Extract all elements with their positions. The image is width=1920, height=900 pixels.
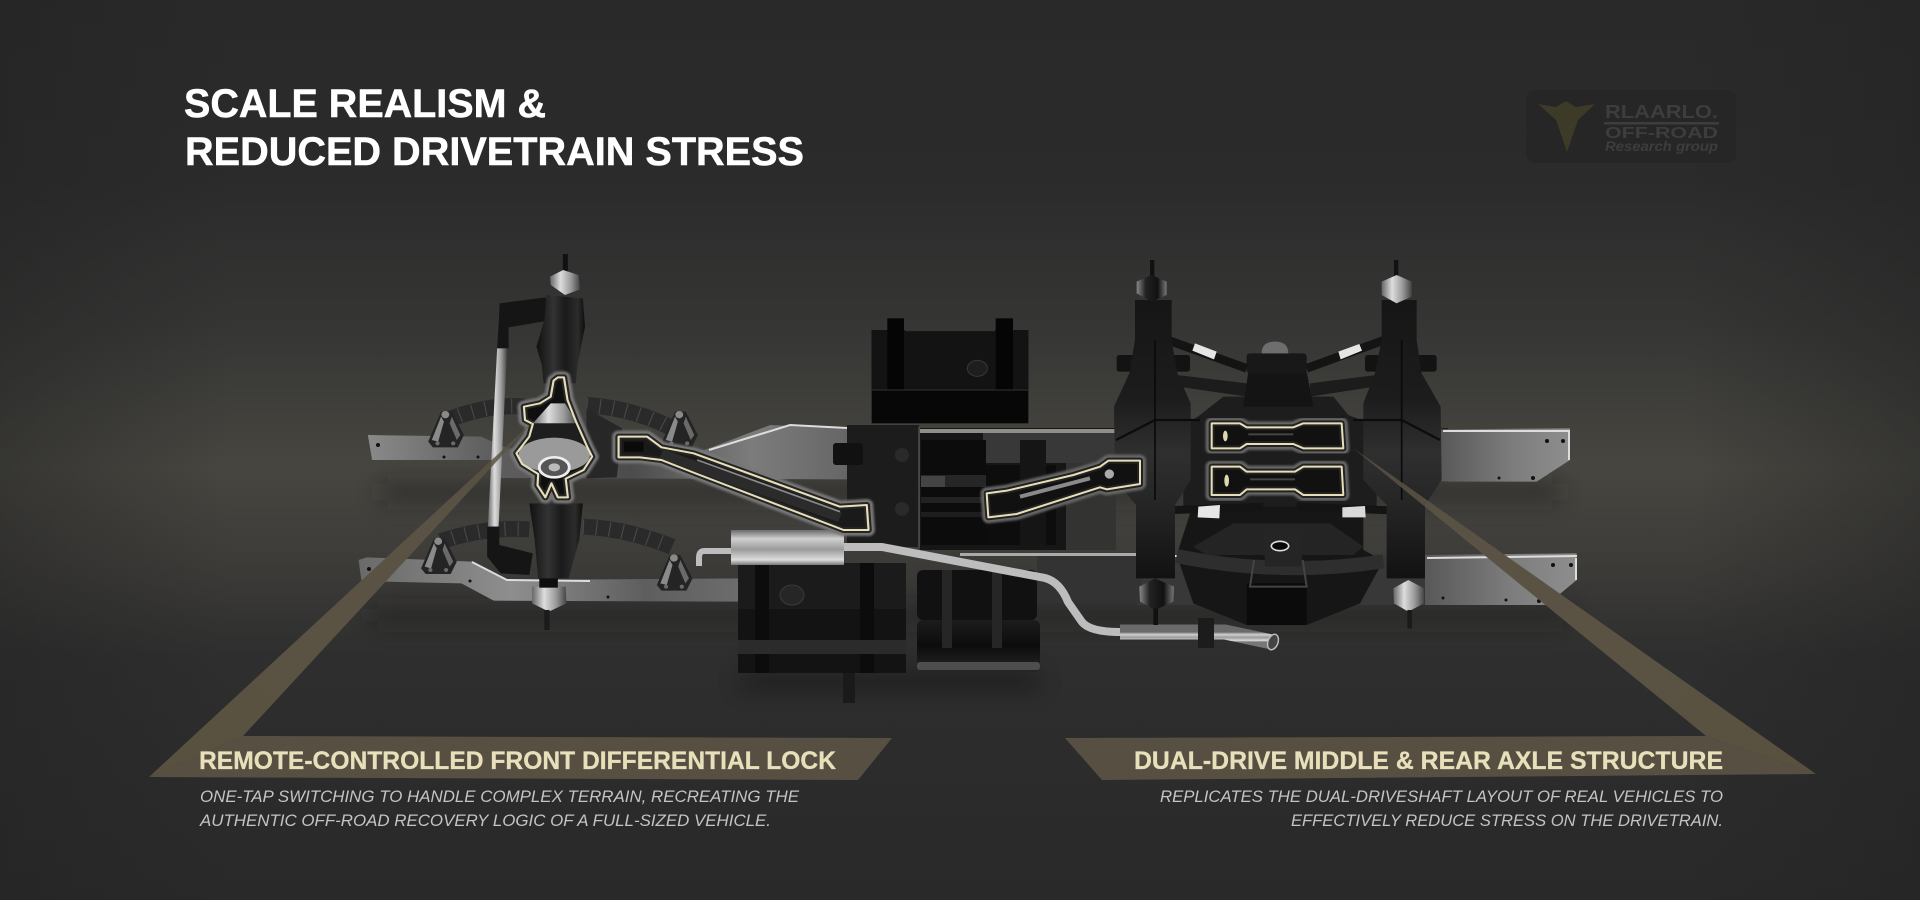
upper mid rail behind rear axle [1113,428,1448,482]
dark band [987,461,1140,517]
dark band [1212,423,1343,448]
hub collar [539,578,558,588]
spring shackles [421,411,698,591]
leaf springs [440,405,679,547]
cream yoke [1224,475,1229,487]
title [184,82,804,174]
right spine [1399,340,1404,500]
left description [199,787,800,830]
tail pipe [844,547,1120,632]
shaft sheen [1250,478,1295,480]
muffler [731,530,844,565]
shaft sheen [697,460,840,512]
upper knuckle [536,295,585,383]
left heading: REMOTE-CONTROLLED FRONT DIFFERENTIAL LOCK [199,747,836,775]
logo rule [1604,122,1719,124]
rear driveshaft lower highlight [1212,467,1343,495]
right heading: DUAL-DRIVE MIDDLE & REAR AXLE STRUCTURE [1134,747,1723,775]
steering arm lower [487,527,533,575]
left banjo housing [1114,300,1191,578]
top block [1243,372,1313,407]
air tanks [917,570,1040,672]
dark diff band [524,423,586,445]
lower hub [532,587,566,612]
shaft sheen [1248,433,1293,435]
logo subtitle: OFF-ROAD [1605,125,1718,142]
cream outline [619,437,869,530]
title line 1: SCALE REALISM & [184,82,546,126]
exhaust clamp [1198,618,1214,648]
shaft sheen [1020,478,1090,497]
center bracket [1263,527,1303,567]
rear driveshaft upper highlight [1212,423,1343,448]
left spine [1152,340,1157,500]
left lower link [1157,507,1263,511]
left bottom stud [1153,608,1158,625]
U-bolt clamp [1250,560,1307,587]
rear muffler pipe [1120,632,1272,642]
transmission block [921,440,1056,545]
left crossbar [1116,420,1200,440]
front differential highlight [516,377,592,497]
logo emblem [1538,101,1595,152]
right top stud [1394,260,1398,278]
upper struts [1177,375,1247,397]
exhaust system [699,530,1280,651]
rail bolt holes [367,439,1573,603]
lower knuckle [529,503,583,578]
battery box [872,318,1028,423]
pinion center [549,463,560,471]
right wing mount [1365,355,1437,372]
left top stud [1150,260,1154,278]
callout ribbon: rear axle [1065,736,1816,780]
right description [1160,787,1723,830]
right top nut [1382,275,1412,303]
central drivetrain body [738,318,1142,703]
lower chassis block [1247,583,1307,625]
shaft joint [1105,469,1114,479]
left upper link tab [1192,343,1217,359]
left upper link [1153,335,1247,368]
halo [1212,467,1343,495]
cream outline [1212,467,1343,495]
halo [1212,423,1343,448]
central bridge [1183,397,1377,507]
rail highlights [472,425,1577,581]
front driveshaft highlight [619,437,869,530]
right description line 1: REPLICATES THE DUAL-DRIVESHAFT LAYOUT OF REAL VEHICLES TO [1160,787,1723,806]
lower mid rail behind rear axle [1137,556,1432,605]
left description line 2: AUTHENTIC OFF-ROAD RECOVERY LOGIC OF A FULL-SIZED VEHICLE. [199,811,771,830]
chassis frame rails [359,425,1577,605]
left lower tab [1198,505,1220,518]
lower frame rail left section [359,557,740,602]
yoke joint [624,442,644,452]
lower stud [544,610,550,630]
right lower tab [1342,506,1366,517]
right bottom nut [1393,580,1424,612]
rear axle assembly [1114,260,1442,628]
upper hex nut [550,270,580,295]
inlet pipe [699,551,731,566]
upper frame rail left section [368,425,847,479]
logo wordmark: RLAARLO. [1605,102,1718,122]
right bottom stud [1407,610,1412,628]
upper stud [563,254,568,272]
logo plate [1526,90,1736,163]
leaf spring [1177,556,1383,568]
cream outline [1212,423,1343,448]
upper struts right [1310,375,1377,397]
title line 2: REDUCED DRIVETRAIN STRESS [185,130,804,174]
left wing mount [1117,355,1190,372]
halo [516,377,592,497]
fuel tank [738,563,906,703]
chrome ring gear [519,438,590,472]
top plate [1247,353,1307,373]
right upper link [1307,335,1398,368]
steering arm upper [497,297,551,348]
right upper link tab [1338,344,1362,359]
chrome diff shoulder [533,403,577,423]
halo [987,461,1140,517]
dark band [1212,467,1343,495]
dome cap [1262,342,1288,353]
pinion ring [539,457,569,477]
lower axle backing [1177,503,1383,625]
middle driveshaft highlight [987,461,1140,517]
cross member panel [833,425,919,547]
steering rod [488,348,507,527]
cream yoke [1223,431,1228,441]
left top nut [1137,275,1167,302]
right banjo housing [1363,300,1442,578]
right crossbar [1353,420,1440,440]
dark band [619,437,869,530]
lower cross housing [1193,523,1363,555]
right description line 2: EFFECTIVELY REDUCE STRESS ON THE DRIVETRAIN. [1291,811,1723,830]
callout beam: rear axle [1353,448,1816,774]
right lower link [1297,507,1400,511]
upper mid frame channel [920,428,1116,550]
callout beam: front differential [149,420,535,777]
upper frame rail right end [1440,428,1570,482]
logo tagline: Research group [1605,139,1718,154]
dark band [516,377,592,497]
bracket ring [1271,541,1289,551]
callout ribbon: front differential [149,736,892,780]
shaft tube [661,454,840,517]
halo [619,437,869,530]
cream outline [516,377,592,497]
chassis drop shadow [370,482,1570,688]
logo badge [1526,90,1736,163]
exhaust tip [1266,633,1280,651]
cream outline [987,461,1140,517]
axle housing arm [586,408,622,478]
left bottom nut [1139,578,1174,610]
left description line 1: ONE-TAP SWITCHING TO HANDLE COMPLEX TERRAIN, RECREATING THE [200,787,800,806]
lower mid frame channel [960,553,1142,603]
front axle assembly [421,254,698,630]
lower frame rail right end [1425,553,1577,605]
